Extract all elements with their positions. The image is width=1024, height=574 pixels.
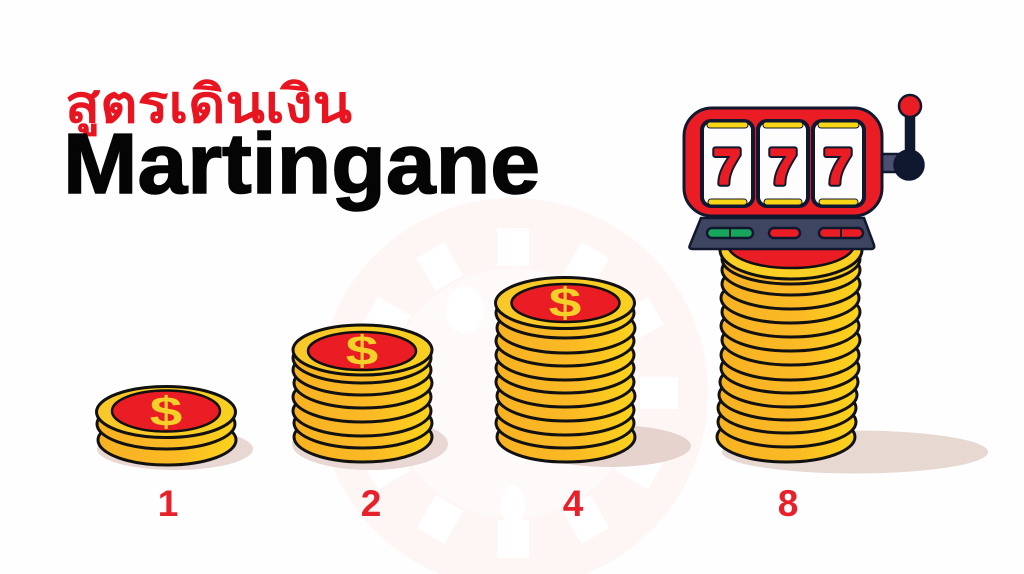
- step labels: 2: [361, 483, 381, 524]
- title: Martingane: Martingane: [63, 117, 540, 212]
- reel sevens outline: [713, 139, 852, 195]
- stack 4: [496, 278, 691, 467]
- console buttons: [707, 228, 863, 238]
- stack 8: [717, 221, 988, 474]
- lever: [880, 95, 924, 180]
- stack 2: [292, 325, 448, 470]
- reel sevens outline: 7: [769, 139, 797, 195]
- reel sevens outline: 7: [824, 139, 852, 195]
- shadow: [292, 418, 448, 470]
- step labels: 4: [563, 483, 584, 524]
- shadow: [529, 425, 691, 467]
- reel sevens outline: 7: [713, 139, 741, 195]
- reel sevens: [713, 139, 852, 195]
- step labels: 1: [158, 483, 178, 524]
- icon: slot machine: [684, 95, 924, 249]
- stack 2: $: [346, 327, 378, 374]
- reel lights: [707, 122, 859, 205]
- console: [689, 218, 874, 249]
- title: Thai heading: สูตรเดินเงิน: [65, 76, 352, 137]
- stack 1: [96, 386, 253, 470]
- reel sevens: 7: [824, 139, 852, 195]
- stack 1: $: [150, 388, 182, 435]
- stack 4: $: [549, 279, 581, 326]
- shadow: [722, 430, 988, 474]
- shadow: [97, 428, 253, 470]
- background poker chip watermark: [318, 198, 708, 574]
- step labels: [158, 483, 798, 524]
- reels: [702, 121, 864, 206]
- step labels: 8: [778, 483, 798, 524]
- reel sevens: 7: [769, 139, 797, 195]
- machine body: [684, 108, 882, 216]
- reel sevens: 7: [713, 139, 741, 195]
